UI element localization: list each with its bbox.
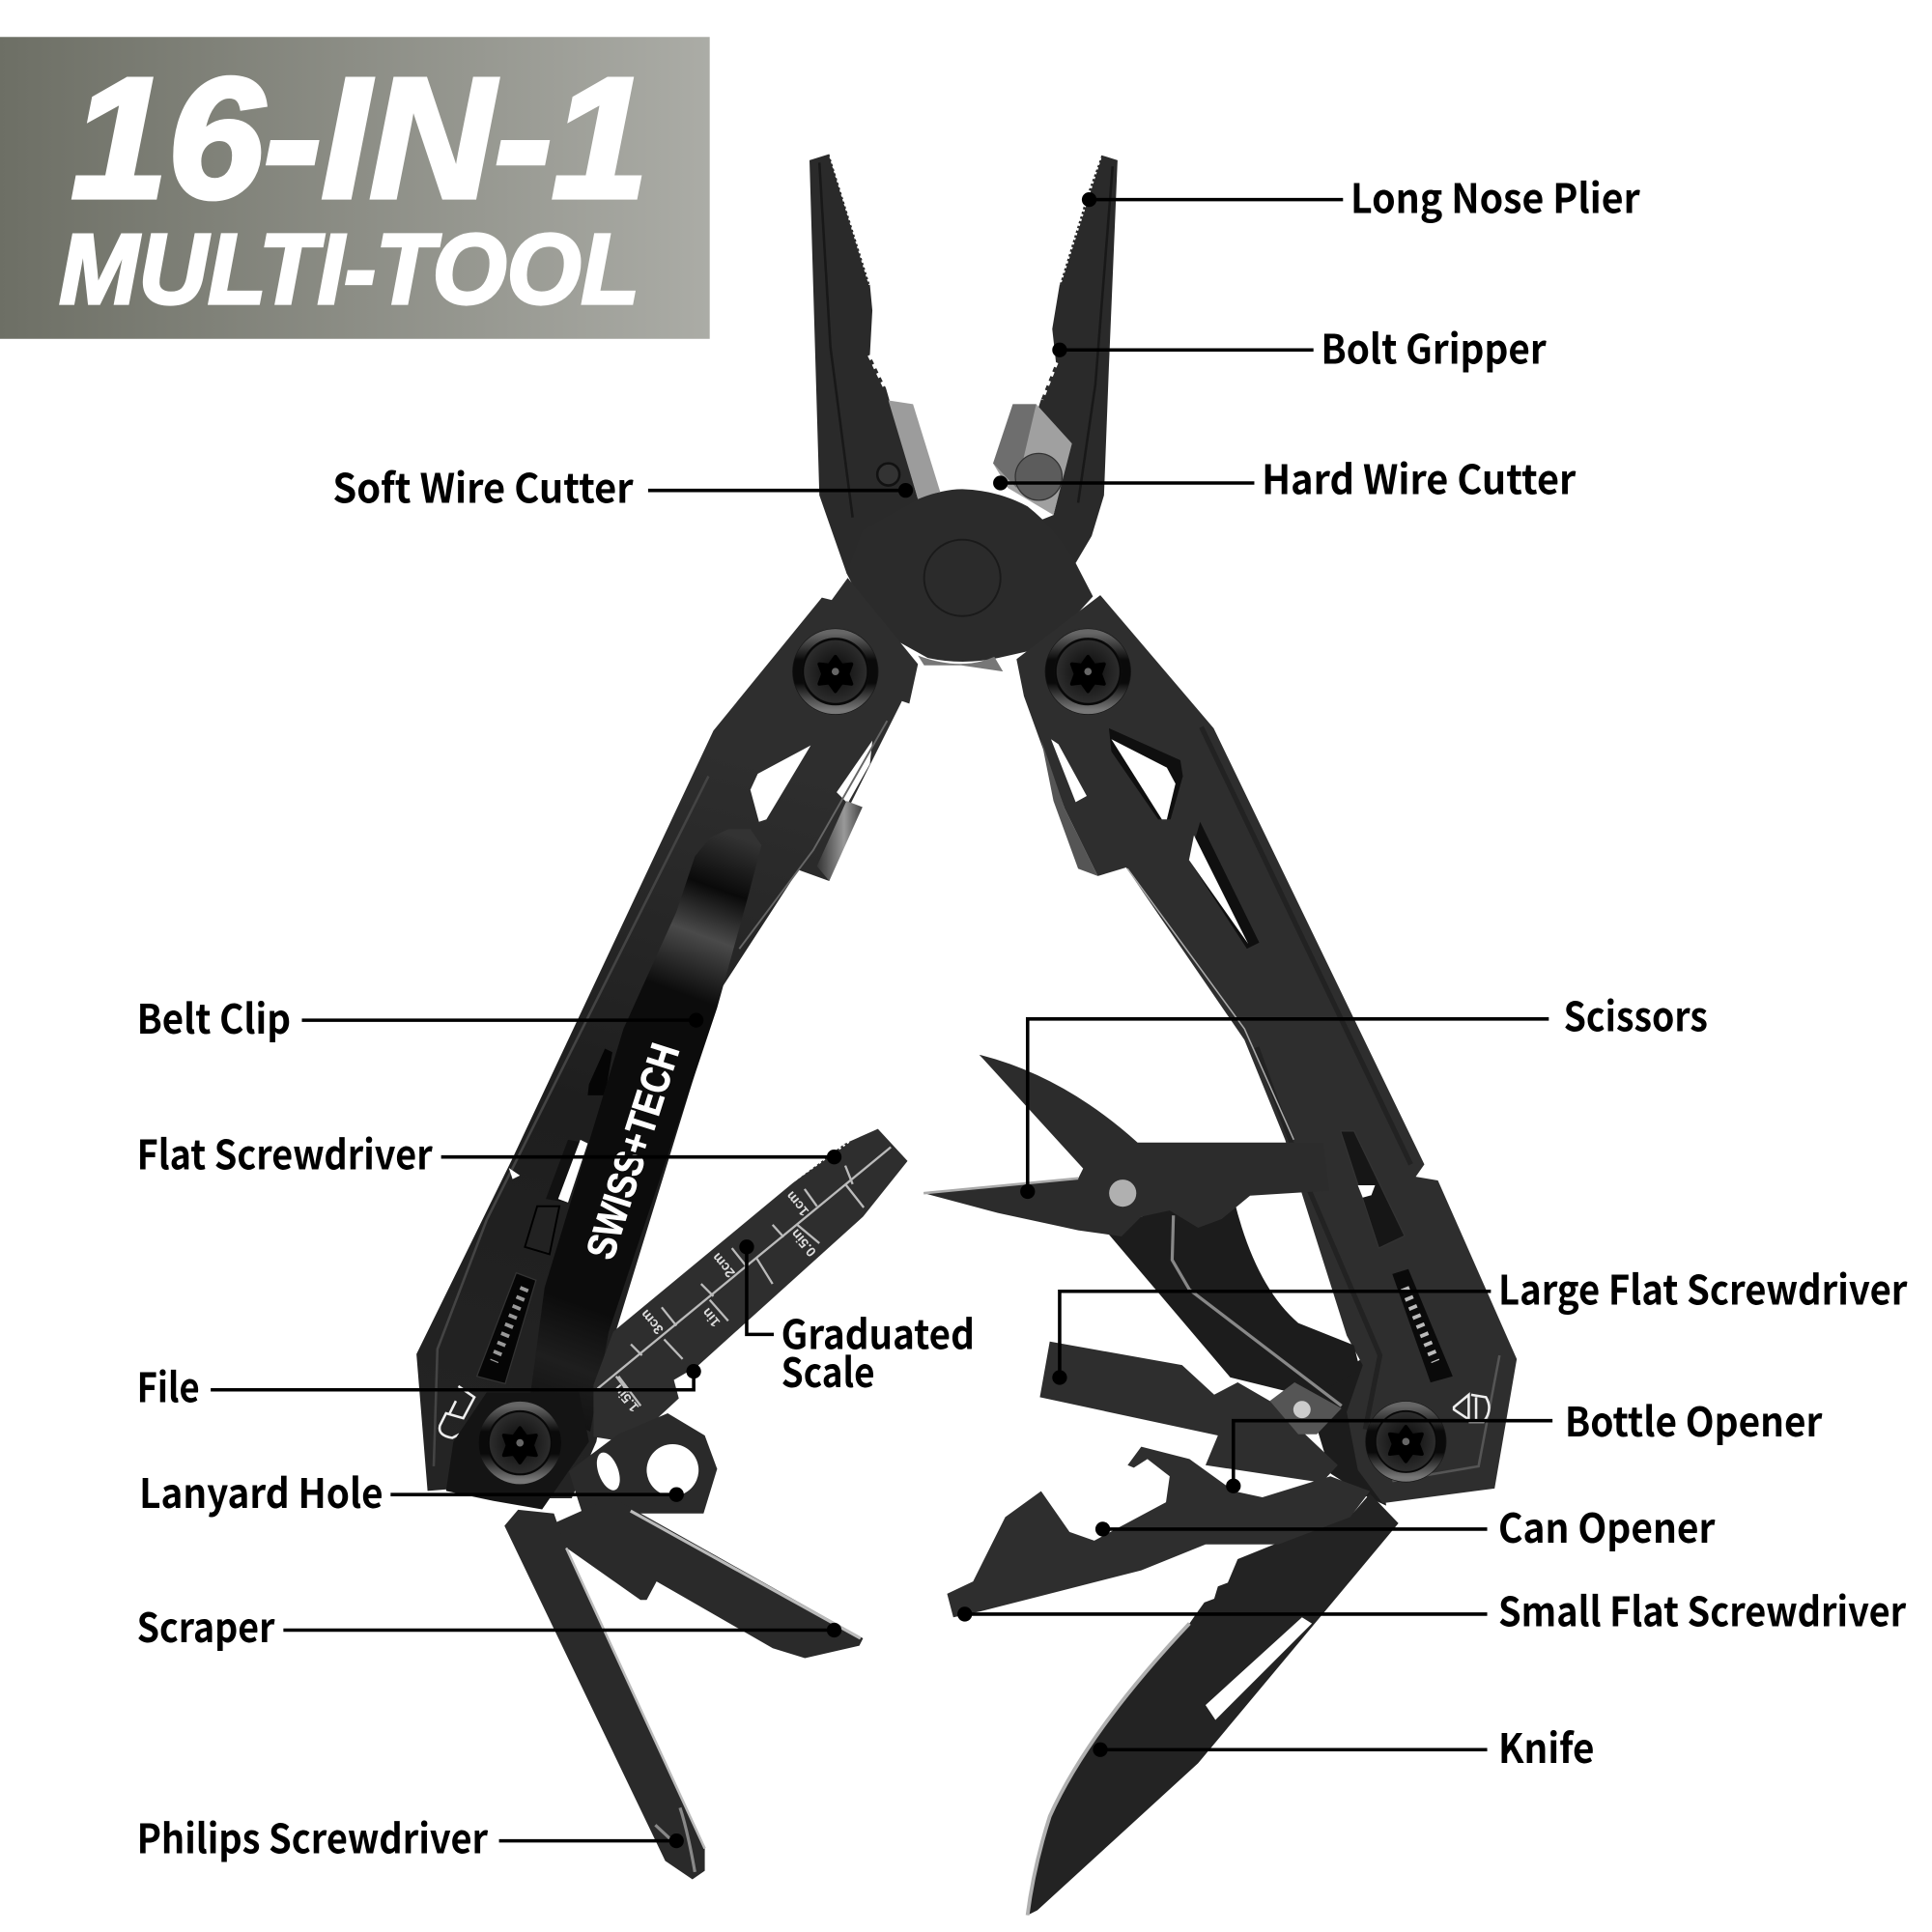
callout: Lanyard Hole: Lanyard Hole — [139, 1462, 384, 1520]
callout: Philips Screwdriver: Philips Screwdriver — [137, 1806, 489, 1865]
callout: Belt Clip: Belt Clip — [137, 987, 291, 1046]
scraper — [554, 1497, 863, 1658]
callout: Long Nose Plier — [1082, 167, 1640, 226]
callout: Soft Wire Cutter: Soft Wire Cutter — [332, 456, 634, 515]
title: 16-IN-1: 16-IN-1 — [71, 43, 648, 234]
upper scissor blade — [923, 1055, 1329, 1236]
lower scissor arm — [1105, 1200, 1360, 1397]
right handle base joint — [1306, 1355, 1386, 1506]
scale markings — [598, 1148, 891, 1406]
callout: Graduated Scale: Scale — [781, 1341, 875, 1400]
callout: File: File — [137, 1356, 200, 1415]
brand: SWISS+TECH: SWISS+TECH — [578, 1038, 688, 1264]
scale tool: 2cm — [708, 1250, 738, 1281]
screw top right — [1045, 629, 1131, 715]
screws — [792, 629, 1131, 715]
callout: Bottle Opener: Bottle Opener — [1565, 1390, 1823, 1449]
pliers — [810, 154, 1118, 671]
callout: Knife: Knife — [1498, 1717, 1595, 1776]
callout: Bottle Opener — [1226, 1390, 1823, 1493]
callout: Bolt Gripper: Bolt Gripper — [1321, 317, 1547, 376]
scale tool: 0.5in — [787, 1227, 819, 1260]
callout: Scissors: Scissors — [1564, 985, 1708, 1044]
callout: Knife — [1093, 1717, 1595, 1776]
title banner — [0, 37, 710, 339]
scale tool: 1.5in — [610, 1381, 641, 1415]
knife — [1028, 1493, 1399, 1916]
belt clip — [529, 829, 761, 1432]
callout: Graduated Scale — [739, 1239, 975, 1400]
callout: Belt Clip — [137, 987, 703, 1046]
lanyard ring piece — [569, 1413, 717, 1514]
callout: File — [137, 1356, 701, 1415]
callout: Hard Wire Cutter — [993, 447, 1577, 506]
left handle — [416, 578, 918, 1498]
screw bottom right — [1365, 1401, 1446, 1482]
callout: Graduated Scale: Graduated — [781, 1303, 975, 1362]
callout: Hard Wire Cutter: Hard Wire Cutter — [1262, 447, 1577, 506]
right handle — [1016, 595, 1517, 1503]
callout: Scissors — [1020, 985, 1708, 1199]
left handle holes — [751, 746, 810, 822]
callout: Flat Screwdriver: Flat Screwdriver — [137, 1122, 433, 1181]
lower left plate — [446, 1392, 589, 1509]
hard wire cutter block — [993, 404, 1072, 515]
scale tool: 3cm — [638, 1307, 667, 1338]
icon: right handle tool mark — [1454, 1395, 1490, 1422]
callout: Long Nose Plier: Long Nose Plier — [1350, 167, 1640, 226]
callout: Scraper — [137, 1596, 841, 1655]
callout: Can Opener — [1095, 1496, 1716, 1555]
callout: Flat Screwdriver — [137, 1122, 841, 1181]
callout: Scraper: Scraper — [137, 1596, 275, 1655]
left handle lower slots — [587, 1048, 612, 1095]
callout: Can Opener: Can Opener — [1498, 1496, 1716, 1555]
scissors — [923, 1055, 1360, 1406]
callout: Soft Wire Cutter — [332, 456, 913, 515]
right handle holes — [1109, 728, 1182, 819]
icon: left handle tool mark — [440, 1386, 474, 1438]
right wheel slot — [1392, 1269, 1453, 1382]
scale tool — [593, 1129, 908, 1443]
left handle strip — [817, 801, 863, 881]
multi-tool illustration — [416, 154, 1517, 1916]
large flat screwdriver — [1039, 1342, 1342, 1483]
philips screwdriver — [504, 1510, 705, 1880]
plier pivot — [846, 489, 1093, 662]
left plier jaw — [810, 154, 970, 640]
screw bottom left — [478, 1401, 562, 1485]
callout: Lanyard Hole — [139, 1462, 684, 1520]
scale tool: 1in — [698, 1305, 723, 1330]
can and bottle opener — [947, 1447, 1370, 1617]
right handle strip — [1041, 739, 1097, 876]
screw top left — [792, 629, 878, 715]
callout: Small Flat Screwdriver — [957, 1580, 1907, 1639]
callout: Bolt Gripper — [1052, 317, 1547, 376]
scissor spring — [1172, 1215, 1342, 1406]
right plier jaw — [985, 156, 1118, 563]
subtitle: MULTI-TOOL: MULTI-TOOL — [59, 213, 639, 325]
left wheel slot — [477, 1273, 536, 1383]
callout: Large Flat Screwdriver — [1052, 1259, 1908, 1385]
scale tool: 1cm — [782, 1188, 811, 1219]
